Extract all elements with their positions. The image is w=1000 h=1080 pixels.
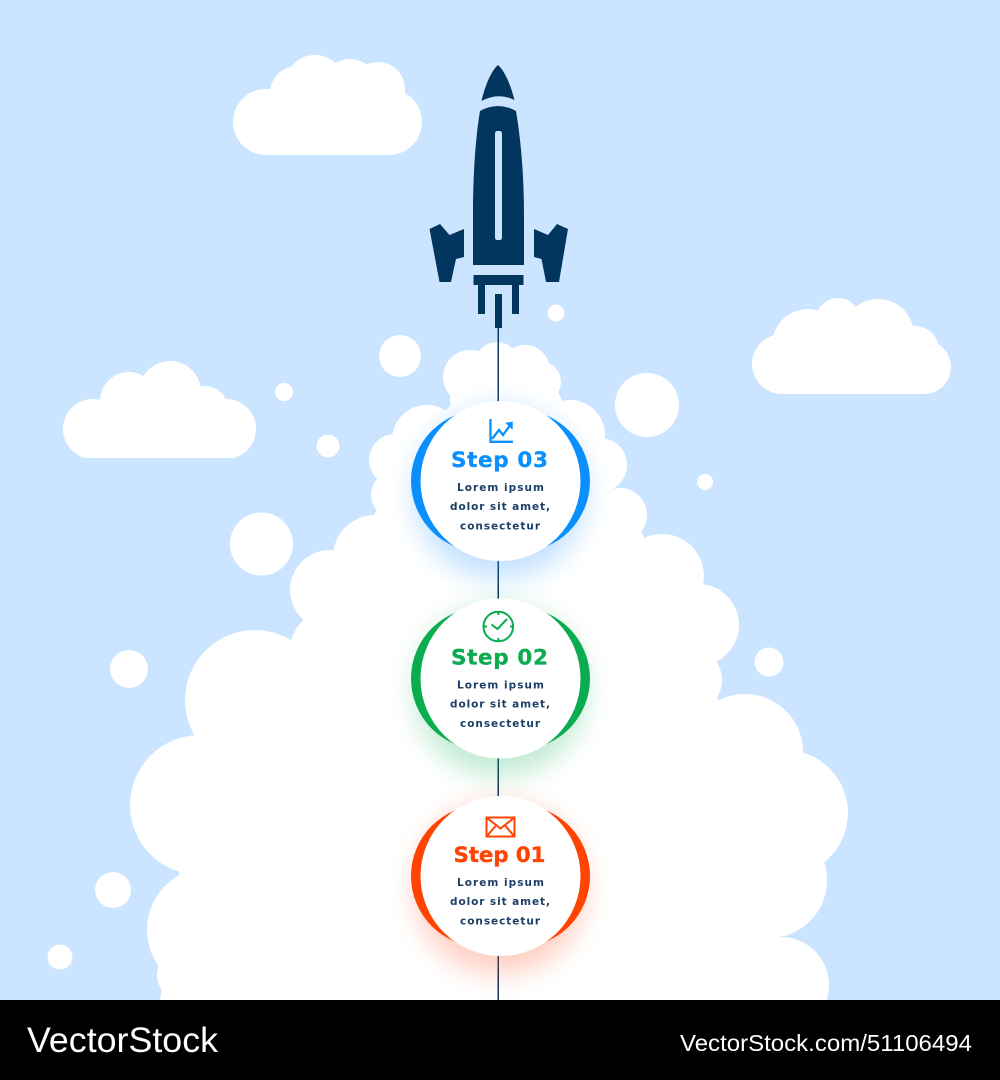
text block — [450, 680, 550, 730]
text block: consectetur — [460, 916, 541, 928]
watermark url: VectorStock.com/51106494 — [680, 1030, 972, 1056]
heading: Step 01 — [454, 843, 546, 868]
text block — [450, 877, 550, 928]
heading: Step 03 — [451, 448, 548, 473]
text block: dolor sit amet, — [450, 501, 550, 513]
cloud: middle left — [63, 361, 256, 459]
text block — [450, 482, 550, 532]
step 01 — [411, 796, 590, 974]
text block: dolor sit amet, — [450, 896, 550, 908]
step 02 — [411, 598, 590, 776]
watermark bar — [0, 1000, 1000, 1080]
text block: Lorem ipsum — [457, 680, 544, 692]
text block: dolor sit amet, — [450, 698, 550, 710]
icon: clock — [484, 612, 513, 641]
floating bubbles — [48, 304, 784, 970]
step 03 — [411, 401, 590, 579]
icon: envelope — [486, 818, 514, 836]
timeline line — [498, 326, 499, 1000]
text block: consectetur — [460, 718, 541, 730]
heading: Step 02 — [451, 646, 548, 670]
watermark logo text: VectorStock — [27, 1021, 219, 1060]
text block: Lorem ipsum — [457, 877, 544, 889]
rocket exhaust cloud — [130, 342, 848, 1033]
cloud: top left — [233, 55, 422, 155]
text block: consectetur — [460, 520, 541, 532]
cloud: right — [752, 298, 951, 394]
text block: Lorem ipsum — [457, 482, 544, 494]
icon: growth chart — [490, 419, 513, 442]
rocket — [430, 65, 568, 328]
